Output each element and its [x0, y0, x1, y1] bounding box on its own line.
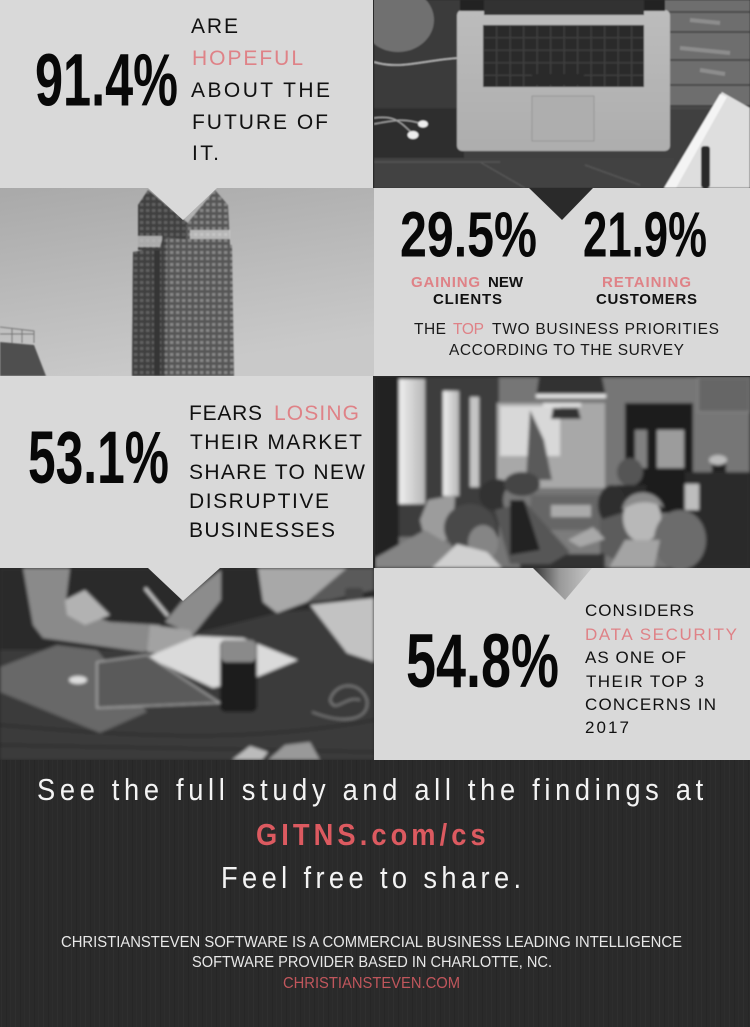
- text: fears losing their market share: THEIR MARKET: [190, 431, 362, 454]
- text: are hopeful about the future of IT: [191, 15, 330, 165]
- stat: 91.4%: 91.4%: [35, 38, 178, 122]
- text: considers data security: CONSIDERS: [585, 601, 694, 620]
- link: GITNS.com/cs: GITNS.com/cs: [256, 818, 486, 852]
- label: gaining new clients: [411, 274, 524, 308]
- text: survey caption: TOP: [453, 321, 484, 338]
- text: considers data security: THEIR TOP 3: [586, 672, 704, 691]
- text: are hopeful about the future of IT: ABOUT THE: [191, 79, 330, 102]
- text: fears losing their market share: LOSING: [274, 402, 359, 425]
- company description: CHRISTIANSTEVEN.COM: [283, 975, 460, 992]
- panel: data security concerns: [374, 568, 750, 760]
- text: are hopeful about the future of IT: FUTURE OF: [192, 111, 328, 134]
- text: are hopeful about the future of IT: IT.: [192, 142, 219, 165]
- label: retaining customers: [596, 274, 697, 308]
- text: considers data security: AS ONE OF: [585, 648, 686, 667]
- text: considers data security: CONCERNS IN: [585, 695, 716, 714]
- text: fears losing their market share: [189, 402, 365, 542]
- notch: photo pointer: [533, 568, 592, 600]
- label: retaining customers: RETAINING: [602, 274, 691, 291]
- panel: hopeful about the future: [0, 0, 373, 220]
- panel: losing market share: [0, 376, 373, 601]
- photo: writing in notebook at wooden table: [0, 568, 374, 760]
- photo: skyscraper against grey sky: [0, 188, 374, 376]
- text: fears losing their market share: BUSINESSES: [189, 519, 335, 542]
- text: considers data security: 2017: [585, 718, 629, 737]
- label: gaining new clients: GAINING: [411, 274, 480, 291]
- text: survey caption: [414, 321, 719, 359]
- call to action heading: See the full study and all the findings at: [37, 773, 703, 807]
- panel: top two business priorities: [374, 188, 750, 376]
- text: are hopeful about the future of IT: HOPEFUL: [192, 47, 303, 70]
- label: retaining customers: CUSTOMERS: [596, 291, 697, 308]
- text: are hopeful about the future of IT: ARE: [191, 15, 238, 38]
- company description: [61, 934, 682, 992]
- text: considers data security: [585, 601, 737, 737]
- footer panel: [0, 760, 750, 1027]
- photo: restaurant table: [375, 377, 750, 570]
- text: fears losing their market share: DISRUPTIVE: [189, 490, 329, 513]
- text: survey caption: THE: [414, 321, 446, 338]
- call to share: Feel free to share.: [221, 861, 521, 895]
- company description: SOFTWARE PROVIDER BASED IN CHARLOTTE, NC.: [192, 954, 552, 971]
- text: fears losing their market share: FEARS: [189, 402, 262, 425]
- stat: 53.1%: 53.1%: [28, 416, 169, 499]
- text: fears losing their market share: SHARE TO NEW: [189, 461, 365, 484]
- label: gaining new clients: NEW: [488, 274, 524, 291]
- text: survey caption: TWO BUSINESS PRIORITIES: [492, 321, 719, 338]
- photo: laptop on desk: [362, 0, 750, 188]
- stat: 29.5%: 29.5%: [400, 198, 537, 270]
- text: considers data security: DATA SECURITY: [585, 625, 737, 644]
- company description: CHRISTIANSTEVEN SOFTWARE IS A COMMERCIAL BUSINESS LEADING INTELLIGENCE: [61, 934, 682, 951]
- text: survey caption: ACCORDING TO THE SURVEY: [449, 342, 684, 359]
- stat: 54.8%: 54.8%: [406, 619, 559, 704]
- label: gaining new clients: CLIENTS: [433, 291, 502, 308]
